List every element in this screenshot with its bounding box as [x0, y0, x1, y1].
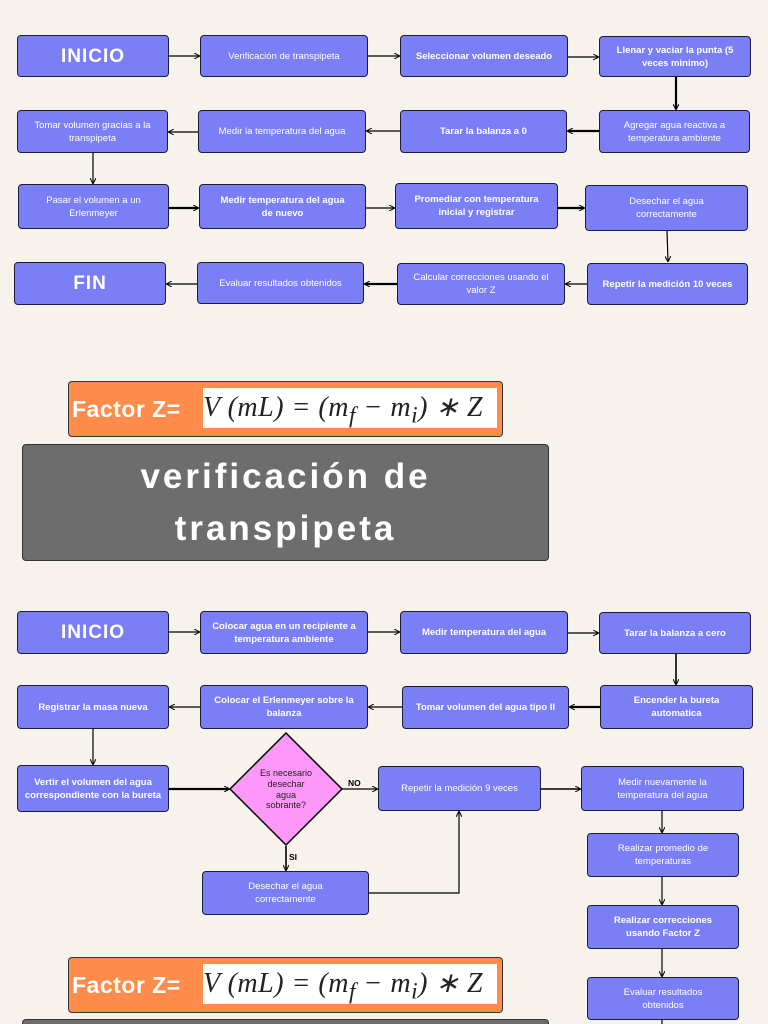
decision diamond: Es necesario: [260, 768, 312, 778]
box: [378, 766, 541, 811]
decision diamond: desechar: [267, 779, 305, 789]
box: [599, 110, 750, 153]
box: [202, 871, 369, 915]
factor Z 2: [68, 957, 503, 1013]
box: Verificación de transpipeta: [228, 50, 340, 62]
box: [397, 263, 565, 305]
box: [400, 110, 567, 153]
box: Colocar el Erlenmeyer sobre la balanza: [214, 695, 354, 719]
box: FIN: FIN: [73, 273, 107, 294]
box: [17, 765, 169, 812]
box: [200, 685, 368, 729]
heading: verificación de transpipeta: verificación de: [140, 457, 431, 496]
box: INICIO 2: [17, 611, 169, 654]
box: [587, 977, 739, 1020]
box: INICIO 2: INICIO: [61, 622, 125, 643]
box: Colocar agua en un recipiente a temperatura ambiente: [212, 620, 356, 644]
box: [599, 612, 751, 654]
gray heading 2: [22, 1019, 549, 1024]
box: [400, 35, 568, 77]
factor Z 1: Factor Z=: [72, 396, 181, 422]
box: [18, 184, 169, 229]
box: Desechar el agua correctamente: [629, 196, 704, 220]
box: Medir nuevamente la temperatura del agua: [617, 776, 708, 800]
box: INICIO 1: INICIO: [61, 46, 125, 66]
label: SI: SI: [289, 852, 297, 862]
factor Z 1: V (mL) = (mf − mi) ∗ Z: [203, 392, 483, 429]
box: Desechar el agua correctamente: [248, 881, 323, 905]
decision diamond: sobrante?: [266, 800, 306, 810]
box: Vertir el volumen del agua correspondiente con la bureta: [25, 776, 161, 800]
box: Repetir la medición 10 veces: [603, 278, 732, 290]
box: [581, 766, 744, 811]
box: Tarar la balanza a cero: [624, 628, 726, 638]
factor Z 1: [68, 381, 503, 437]
box: [200, 611, 368, 654]
box: [199, 184, 366, 229]
box: Medir la temperatura del agua: [219, 126, 345, 137]
decision diamond: agua: [276, 790, 296, 800]
box: Evaluar resultados obtenidos: [624, 986, 702, 1010]
box: FIN: [14, 262, 166, 305]
box: Tarar la balanza a 0: [440, 126, 527, 137]
factor Z 2: V (mL) = (mf − mi) ∗ Z: [203, 968, 483, 1005]
box: Realizar correcciones usando Factor Z: [614, 915, 712, 939]
heading: verificación de transpipeta: transpipeta: [175, 509, 396, 548]
box: Llenar y vaciar la punta (5 veces minimo): [617, 44, 733, 68]
label: NO: NO: [348, 778, 361, 788]
box: Promediar con temperatura inicial y registrar: [414, 194, 539, 218]
box: [197, 262, 364, 304]
decision diamond: [230, 733, 342, 845]
box: Agregar agua reactiva a temperatura ambiente: [624, 120, 725, 144]
box: Repetir la medición 9 veces: [401, 783, 518, 794]
box: [599, 36, 751, 77]
box: [17, 110, 168, 153]
box: [587, 263, 748, 305]
box: [587, 905, 739, 949]
box: Pasar el volumen a un Erlenmeyer: [46, 194, 141, 218]
box: [400, 611, 568, 654]
box: [395, 183, 558, 229]
box: Tomar volumen gracias a la transpipeta: [34, 120, 151, 144]
box: [200, 35, 368, 77]
box: Registrar la masa nueva: [38, 702, 148, 712]
box: INICIO 1: [17, 35, 169, 77]
box: Tomar volumen del agua tipo II: [416, 702, 555, 713]
factor Z 2: Factor Z=: [72, 972, 181, 998]
box: [402, 686, 569, 729]
box: [600, 685, 753, 729]
box: Medir temperatura del agua: [422, 627, 546, 638]
box: [17, 685, 169, 729]
box: Calcular correcciones usando el valor Z: [413, 272, 549, 296]
box: [585, 185, 748, 231]
box: Seleccionar volumen deseado: [416, 50, 552, 62]
box: [198, 110, 366, 153]
box: [587, 833, 739, 877]
box: Medir temperatura del agua de nuevo: [220, 194, 345, 218]
heading: verificación de transpipeta: [22, 444, 549, 561]
box: Encender la bureta automatica: [634, 695, 719, 719]
box: Realizar promedio de temperaturas: [618, 843, 708, 867]
box: Evaluar resultados obtenidos: [219, 278, 342, 288]
